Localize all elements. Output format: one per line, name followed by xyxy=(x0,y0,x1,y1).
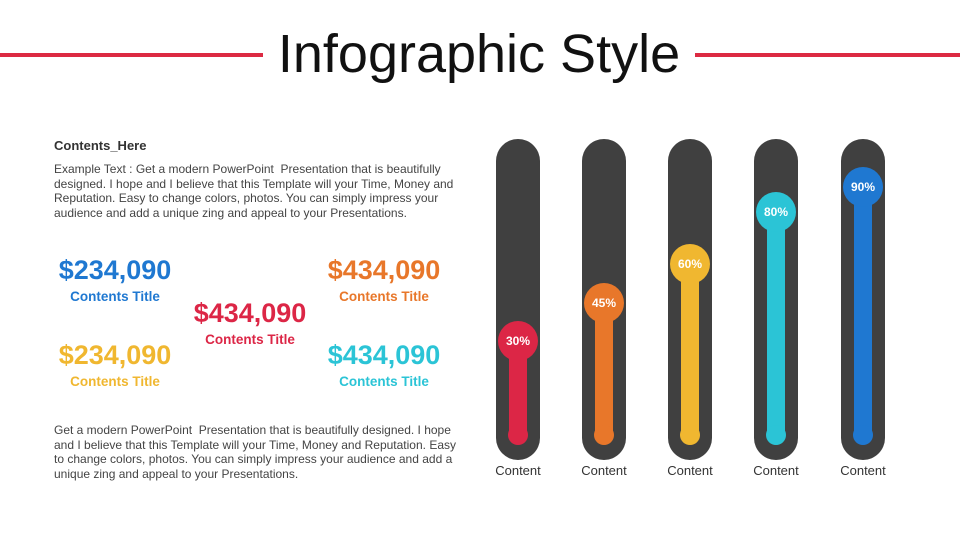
stat: cyan: $434,090 xyxy=(328,340,440,370)
stat: orange: Contents Title xyxy=(339,289,429,304)
bar 60%: 60% xyxy=(678,257,702,271)
intro text: designed. I hope and I believe that this Template will your Time, Money and xyxy=(54,176,453,190)
intro text: audience and add a unique zing and appeal to your Presentations. xyxy=(54,206,407,220)
stat: red: $434,090 xyxy=(194,298,306,328)
bar 60% xyxy=(667,139,713,478)
stat: yellow xyxy=(59,340,171,389)
bar 90%: Content xyxy=(840,463,886,478)
bar 90%: 90% xyxy=(851,180,875,194)
bar 30% xyxy=(495,139,541,478)
stat: yellow: Contents Title xyxy=(70,374,160,389)
title line left xyxy=(0,53,263,57)
stat: cyan: Contents Title xyxy=(339,374,429,389)
bar 80% xyxy=(753,139,799,478)
bottom text: to change colors, photos. You can simply impress your audience and add a xyxy=(54,452,452,466)
bar 45%: Content xyxy=(581,463,627,478)
bottom text: Get a modern PowerPoint Presentation that is beautifully designed. I hope xyxy=(54,423,451,437)
stat: orange: $434,090 xyxy=(328,255,440,285)
stat: red xyxy=(194,298,306,347)
bar 60%: Content xyxy=(667,463,713,478)
intro text: Example Text : Get a modern PowerPoint Presentation that is beautifully xyxy=(54,162,441,176)
title: Infographic Style xyxy=(278,24,680,84)
bottom text: unique zing and appeal to your Presentations. xyxy=(54,466,298,480)
stat: blue: $234,090 xyxy=(59,255,171,285)
title line right xyxy=(695,53,960,57)
intro text xyxy=(54,162,453,220)
stat: cyan xyxy=(328,340,440,389)
bar 80%: 80% xyxy=(764,205,788,219)
bar 45% xyxy=(581,139,627,478)
bottom text xyxy=(54,423,456,480)
bar 30%: 30% xyxy=(506,334,530,348)
bar 30%: Content xyxy=(495,463,541,478)
stat: red: Contents Title xyxy=(205,332,295,347)
heading: Contents_Here xyxy=(54,138,146,153)
bar 80%: Content xyxy=(753,463,799,478)
intro text: Reputation. Easy to change colors, photos. You can simply impress your xyxy=(54,191,438,205)
stat: yellow: $234,090 xyxy=(59,340,171,370)
bar 45%: 45% xyxy=(592,296,616,310)
stat: blue: Contents Title xyxy=(70,289,160,304)
bar 90% xyxy=(840,139,886,478)
stat: orange xyxy=(328,255,440,304)
bottom text: and I believe that this Template will your Time, Money and Reputation. Easy xyxy=(54,438,456,452)
stat: blue xyxy=(59,255,171,304)
